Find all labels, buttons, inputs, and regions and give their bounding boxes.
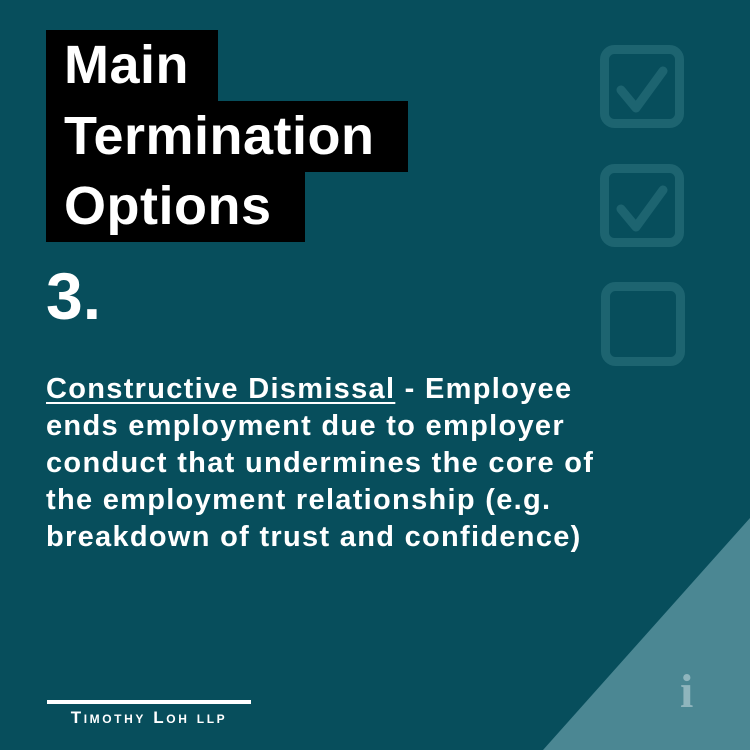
logo: Timothy Loh llp bbox=[71, 708, 227, 727]
number: 3. bbox=[46, 259, 101, 333]
body text: breakdown of trust and confidence) bbox=[46, 521, 582, 553]
title bbox=[46, 30, 408, 242]
body text: the employment relationship (e.g. bbox=[46, 484, 551, 516]
title: Options bbox=[64, 176, 271, 236]
body text bbox=[46, 373, 594, 553]
icon: info: i bbox=[680, 665, 693, 718]
body text: conduct that undermines the core of bbox=[46, 447, 594, 479]
title: Main bbox=[64, 35, 189, 95]
logo bbox=[47, 700, 251, 727]
body text: Constructive Dismissal - Employee bbox=[46, 373, 572, 405]
title: Termination bbox=[64, 106, 375, 166]
body text: ends employment due to employer bbox=[46, 410, 565, 442]
